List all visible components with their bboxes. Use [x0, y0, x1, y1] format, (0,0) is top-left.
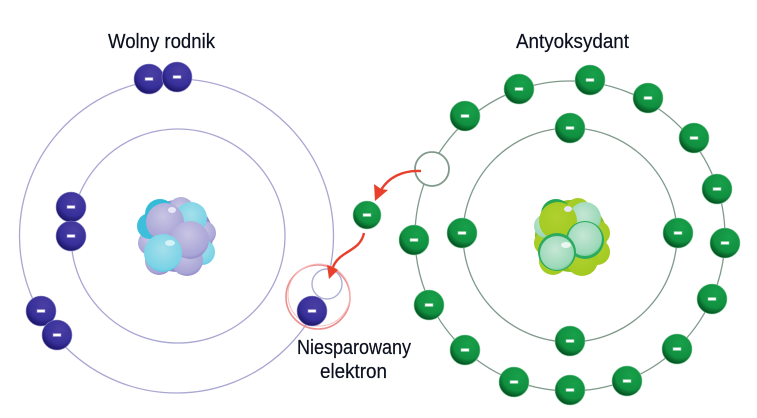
empty electron slot: free radical [312, 269, 342, 299]
arrow: electron leaves antioxidant [374, 171, 421, 201]
unpaired electron highlight ring [286, 264, 350, 329]
label: Niesparowany elektron: elektron [320, 361, 387, 383]
antioxidant nucleus [534, 198, 610, 276]
label: Niesparowany elektron: Niesparowany [297, 337, 411, 359]
label: Niesparowany elektron [297, 337, 411, 383]
heading: Antyoksydant: Antyoksydant [516, 31, 629, 53]
heading: Wolny rodnik: Wolny rodnik [108, 31, 216, 53]
antioxidant orbits [415, 81, 725, 391]
free radical nucleus [137, 197, 216, 276]
empty electron slot: antioxidant [415, 152, 449, 186]
purple electrons [26, 62, 327, 350]
free radical orbits [20, 79, 334, 393]
arrow: electron moves to free radical [327, 233, 364, 279]
green electrons [353, 65, 740, 405]
